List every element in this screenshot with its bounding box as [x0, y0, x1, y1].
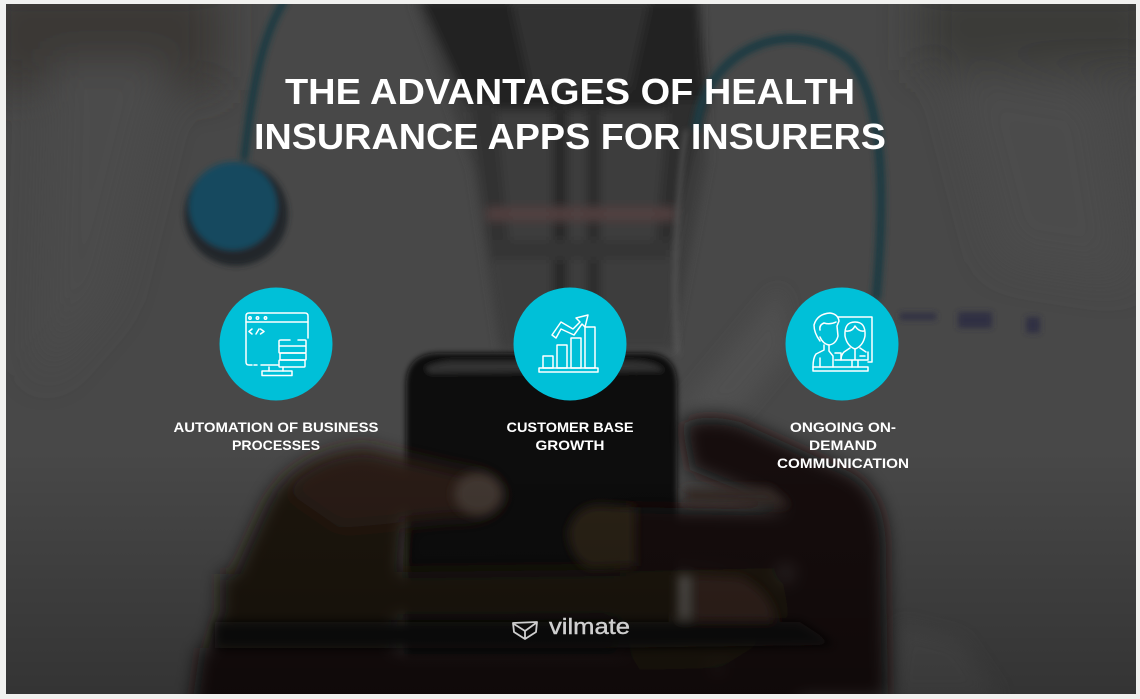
label: customer base growth: CUSTOMER BASE [506, 419, 634, 435]
label: ongoing on-demand communication: ONGOING ON- [790, 419, 896, 435]
phone [406, 353, 677, 660]
title [254, 71, 886, 157]
embroidered name [900, 312, 1040, 333]
panel: customer base growth [506, 288, 634, 453]
lower coat shading and cuff [680, 290, 1000, 699]
label: automation of business processes: PROCESSES [232, 437, 320, 453]
logo wordmark: vilmate [549, 614, 630, 639]
logo: vilmate [513, 614, 630, 639]
shirt and tie [413, 0, 708, 350]
icon: rising bar chart with arrow [514, 288, 626, 400]
knuckle and nail highlights [215, 473, 835, 648]
label: ongoing on-demand communication: DEMAND [809, 437, 877, 453]
panel: ongoing on-demand communication [777, 288, 909, 471]
coat shading [6, 4, 1136, 96]
panel: automation of business processes [174, 288, 378, 453]
title: INSURANCE APPS FOR INSURERS [254, 116, 886, 157]
label: ongoing on-demand communication: COMMUNICATION [777, 455, 909, 471]
icon: monitor with code and server stack [220, 288, 332, 400]
label: automation of business processes [174, 419, 378, 453]
label: automation of business processes: AUTOMATION OF BUSINESS [174, 419, 378, 435]
label: customer base growth [506, 419, 634, 453]
bottom darkening [6, 553, 1136, 694]
icon: vilmate envelope mark [513, 622, 537, 639]
hands [190, 418, 888, 699]
stethoscope [184, 0, 881, 355]
label: ongoing on-demand communication [777, 419, 909, 471]
label: customer base growth: GROWTH [536, 437, 604, 453]
icon: two people on a video call [786, 288, 898, 400]
title: THE ADVANTAGES OF HEALTH [285, 71, 855, 112]
